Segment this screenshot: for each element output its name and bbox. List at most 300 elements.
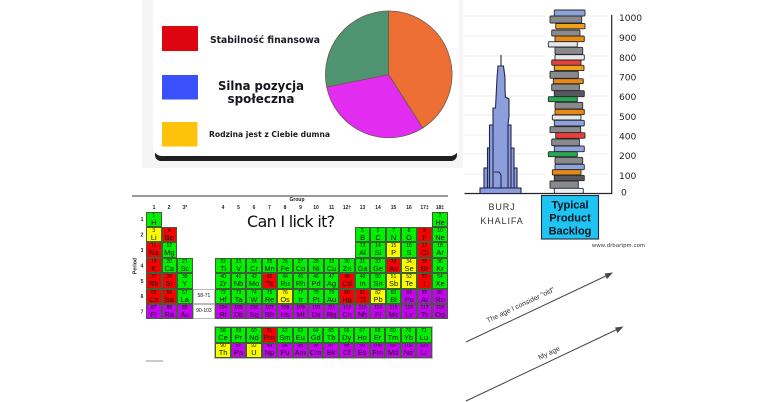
legend swatch: yellow: [162, 122, 198, 146]
periodic table: main grid: Fr: [150, 310, 157, 319]
arrow: the age I consider old: [466, 272, 613, 342]
periodic table: main grid: Be: [165, 233, 174, 242]
periodic table: lanthanides and actinides: Lr: [421, 348, 427, 357]
periodic table: main grid: 78: [313, 290, 319, 296]
periodic table: main grid: 10: [437, 228, 443, 234]
periodic table: lanthanides and actinides: Pu: [280, 348, 289, 357]
periodic table: main grid: 82: [375, 290, 381, 296]
periodic table: main grid: 2: [439, 213, 441, 219]
periodic table: lanthanides and actinides: Ce: [218, 333, 228, 342]
group numbers: [153, 205, 444, 211]
icon: burj khalifa tower: [480, 55, 521, 194]
periodic table: lanthanides and actinides: 95: [298, 343, 303, 349]
periodic table: main grid: 83: [391, 290, 396, 296]
periodic table: lanthanides and actinides: 70: [406, 328, 411, 334]
periodic table: main grid: 42: [251, 274, 257, 280]
periodic table: main grid: F: [422, 233, 427, 242]
periodic table: main grid: 32: [375, 259, 381, 265]
panel: burj khalifa vs product backlog chart: [464, 10, 645, 249]
periodic table: main grid: Pb: [374, 295, 383, 304]
arrow: my age: My age: [537, 346, 561, 362]
group numbers: 11: [329, 205, 334, 211]
periodic table: lanthanides and actinides: 66: [344, 328, 349, 334]
periodic table: lanthanides and actinides: Dy: [342, 333, 351, 342]
periodic table: main grid: Ba: [165, 295, 174, 304]
group numbers: 6: [253, 205, 256, 211]
periodic table: lanthanides and actinides: Pr: [235, 333, 242, 342]
periodic table: main grid: 58-71: [198, 293, 210, 299]
periodic table: lanthanides and actinides: 94: [282, 343, 288, 349]
periodic table: main grid: 6: [377, 228, 379, 234]
periodic table: main grid: P: [391, 248, 396, 257]
periodic table: lanthanides and actinides: 67: [359, 328, 365, 334]
period numbers: 5: [141, 279, 144, 285]
periodic table: main grid: 111: [328, 305, 335, 311]
periodic table: main grid: Zr: [220, 279, 227, 288]
periodic table: main grid: Ni: [313, 264, 320, 273]
periodic table: main grid: Te: [405, 279, 413, 288]
periodic table: main grid: 35: [422, 259, 427, 265]
group numbers: 14: [375, 205, 381, 211]
periodic table: main grid: Mt: [296, 310, 305, 319]
periodic table: main grid: 55: [151, 290, 157, 296]
periodic table: main grid: 4: [168, 228, 171, 234]
group numbers: 12†: [343, 205, 351, 211]
periodic table: main grid: 27: [298, 259, 303, 265]
periodic table: main grid: Ca: [165, 264, 174, 273]
periodic table: main grid: Br: [421, 264, 428, 273]
periodic table: main grid: Og: [435, 310, 445, 319]
periodic table: main grid: Ra: [165, 310, 174, 319]
periodic table: main grid: Co: [296, 264, 305, 273]
periodic table: main grid: 50: [375, 274, 381, 280]
period numbers: 4: [141, 264, 144, 270]
periodic table: main grid: Sg: [250, 310, 259, 319]
periodic table: main grid: 19: [151, 259, 157, 265]
periodic table: lanthanides and actinides: 90: [220, 343, 226, 349]
periodic table: main grid: Tl: [359, 295, 366, 304]
axis value labels: 800: [619, 53, 636, 64]
periodic table: main grid: 90-103: [196, 308, 212, 314]
periodic table: lanthanides and actinides: 69: [390, 328, 396, 334]
periodic table: lanthanides and actinides: Gd: [311, 333, 321, 342]
periodic table: lanthanides and actinides: 98: [344, 343, 349, 349]
label: burj khalifa: KHALIFA: [480, 216, 524, 226]
group numbers: 10: [313, 205, 319, 211]
legend label: silna pozycja społeczna: Silna pozycja: [218, 78, 304, 93]
label: burj khalifa: [480, 202, 524, 226]
periodic table: main grid: Xe: [436, 279, 445, 288]
periodic table: main grid: 104: [219, 305, 227, 311]
periodic table: lanthanides and actinides: 92: [251, 343, 257, 349]
periodic table: main grid: 28: [313, 259, 319, 265]
periodic table: lanthanides and actinides: 64: [313, 328, 319, 334]
pie chart: [325, 11, 452, 138]
periodic table: main grid: In: [359, 279, 366, 288]
periodic table: main grid: Ru: [280, 279, 290, 288]
periodic table: main grid: 115: [390, 305, 398, 311]
periodic table: main grid: Rf: [219, 310, 227, 319]
periodic table: main grid: 23: [236, 259, 241, 265]
periodic table: lanthanides and actinides: No: [404, 348, 413, 357]
periodic table: main grid: 117: [421, 305, 429, 311]
periodic table: main grid: Mg: [164, 248, 174, 257]
periodic table: lanthanides and actinides: Nd: [249, 333, 259, 342]
periodic table: main grid: Rn: [435, 295, 445, 304]
periodic table: main grid: 72: [220, 290, 226, 296]
group numbers: 7: [268, 205, 271, 211]
periodic table: lanthanides and actinides: 91: [236, 343, 241, 349]
periodic table: main grid: Cd: [342, 279, 352, 288]
periodic table: main grid: Cr: [250, 264, 258, 273]
periodic table: main grid: 31: [360, 259, 365, 265]
periodic table: main grid: Sb: [389, 279, 398, 288]
arrow: the age I consider old: The age I consider "old": [486, 286, 556, 325]
axis value labels: 900: [619, 33, 636, 44]
arrow: my age: [466, 326, 624, 401]
periodic table: main grid: Nb: [234, 279, 243, 288]
periodic table: main grid: 110: [312, 305, 320, 311]
legend label: silna pozycja społeczna: społeczna: [228, 91, 294, 106]
periodic table: main grid: 44: [282, 274, 288, 280]
periodic table title: Can I lick it?: [247, 212, 334, 231]
periodic table: main grid: Po: [405, 295, 414, 304]
period numbers: 2: [141, 232, 144, 238]
periodic table: main grid: Db: [234, 310, 243, 319]
label box: typical product backlog: Product: [549, 212, 591, 224]
periodic table: lanthanides and actinides: Lu: [420, 333, 428, 342]
periodic table: main grid: Mo: [249, 279, 259, 288]
periodic table: main grid: B: [360, 233, 365, 242]
periodic table: main grid: 87: [151, 305, 157, 311]
periodic table: main grid: 22: [220, 259, 226, 265]
white card: [153, 0, 459, 156]
periodic table: main grid: 52: [406, 274, 412, 280]
periodic table: main grid: 85: [422, 290, 427, 296]
periodic table: lanthanides and actinides: Es: [358, 348, 366, 357]
periodic table: lanthanides and actinides: Cf: [343, 348, 350, 357]
periodic table: main grid: 112: [343, 305, 351, 311]
periodic table: main grid: Rb: [149, 279, 158, 288]
periodic table: main grid: Ar: [436, 248, 444, 257]
periodic table: lanthanides and actinides: Sm: [279, 333, 290, 342]
periodic table: lanthanides and actinides: 96: [313, 343, 319, 349]
periodic table: lanthanides and actinides: 58: [220, 328, 226, 334]
periodic table: main grid: 24: [251, 259, 257, 265]
periodic table: main grid: K: [151, 264, 156, 273]
periodic table: main grid: As: [389, 264, 398, 273]
periodic table: main grid: 47: [329, 274, 334, 280]
periodic table: main grid: Ge: [373, 264, 383, 273]
periodic table: lanthanides and actinides: 99: [359, 343, 365, 349]
group numbers: 5: [237, 205, 240, 211]
periodic table: main grid: Bi: [390, 295, 397, 304]
axis value labels: 700: [619, 72, 636, 84]
periodic table: lanthanides and actinides: Tb: [327, 333, 336, 342]
periodic table: main grid: 11: [151, 243, 156, 249]
label box: typical product backlog: Backlog: [549, 226, 591, 238]
periodic table: main grid: Se: [405, 264, 414, 273]
period numbers: 3: [141, 248, 144, 254]
periodic table: main grid: 56: [166, 290, 172, 296]
periodic table: main grid: Hf: [219, 295, 227, 304]
periodic table: lanthanides and actinides: Pm: [264, 333, 275, 342]
periodic table: main grid: Ga: [358, 264, 367, 273]
periodic table: main grid: Tc: [266, 279, 273, 288]
periodic table: main grid: 18: [437, 243, 443, 249]
periodic table: main grid: 106: [250, 305, 258, 311]
label box: typical product backlog: [542, 196, 598, 239]
periodic table: main grid: Na: [149, 248, 158, 257]
periodic table: main grid: H: [151, 218, 156, 227]
periodic table: main grid: 13: [360, 243, 365, 249]
periodic table: main grid: 57: [182, 290, 188, 296]
periodic table: lanthanides and actinides: Md: [388, 348, 398, 357]
periodic table: main grid: Y: [182, 279, 187, 288]
periodic table: lanthanides and actinides: 68: [375, 328, 380, 334]
periodic table: main grid: Sc: [180, 264, 189, 273]
axis value labels: 500: [619, 112, 636, 123]
period numbers: 7: [141, 310, 144, 316]
periodic table: main grid: Kr: [436, 264, 444, 273]
periodic table: main grid: Ag: [327, 279, 336, 288]
group numbers: 15: [391, 205, 396, 211]
periodic table: lanthanides and actinides: Cm: [310, 348, 321, 357]
periodic table: main grid: Mc: [389, 310, 398, 319]
periodic table: main grid: 113: [359, 305, 367, 311]
periodic table: lanthanides and actinides: 63: [298, 328, 303, 334]
periodic table: lanthanides and actinides: 103: [420, 343, 428, 349]
periodic table: main grid: Rh: [296, 279, 305, 288]
periodic table: lanthanides and actinides: Bk: [327, 348, 336, 357]
period numbers: 1: [141, 217, 144, 223]
periodic table: main grid: Ir: [298, 295, 303, 304]
periodic table: lanthanides and actinides: U: [251, 348, 257, 357]
periodic table: main grid: Cu: [327, 264, 336, 273]
periodic table: main grid: Lv: [405, 310, 413, 319]
arrow chart: ages: [466, 272, 624, 401]
axis value labels: 600: [619, 92, 636, 103]
periodic table: lanthanides and actinides: 60: [251, 328, 257, 334]
periodic table: main grid: 15: [391, 243, 396, 249]
periodic table: lanthanides and actinides: Yb: [404, 333, 413, 342]
axis value labels: 1000: [619, 13, 642, 24]
periodic table: main grid: 41: [236, 274, 241, 280]
periodic table: main grid: 81: [360, 290, 365, 296]
periodic table: main grid: N: [391, 233, 396, 242]
periodic table: main grid: 20: [166, 259, 172, 265]
periodic table: main grid: 43: [267, 274, 272, 280]
periodic table: main grid: Ts: [421, 310, 428, 319]
periodic table: main grid: Cs: [149, 295, 158, 304]
periodic table: main grid: 75: [267, 290, 272, 296]
axis value labels: 400: [619, 132, 636, 142]
periodic table: main grid: Cl: [421, 248, 428, 257]
icon: stack of backlog books: [548, 10, 585, 193]
periodic table: lanthanides and actinides: 71: [421, 328, 427, 334]
periodic table: main grid: 80: [344, 290, 350, 296]
periodic table: main grid: 40: [220, 274, 226, 280]
periodic table: main grid: 76: [282, 290, 288, 296]
group numbers: 16: [406, 205, 412, 211]
periodic table: lanthanides and actinides: 100: [373, 343, 382, 349]
periodic table: main grid: 39: [182, 274, 188, 280]
periodic table: lanthanides and actinides: Pa: [234, 348, 243, 357]
legend label: rodzina jest z ciebie dumna: Rodzina jest z Ciebie dumna: [209, 130, 330, 139]
periodic table: main grid: Ti: [220, 264, 226, 273]
periodic table: lanthanides and actinides: 62: [282, 328, 288, 334]
periodic table: main grid: 37: [151, 274, 157, 280]
periodic table: main grid: Ac: [180, 310, 189, 319]
periodic table: main grid: 25: [267, 259, 272, 265]
periodic table: main grid: Rg: [327, 310, 336, 319]
periodic table: main grid: Nh: [358, 310, 367, 319]
chart axes: [464, 15, 612, 194]
axis value labels: [619, 13, 642, 198]
periodic table: main grid: 17: [422, 243, 427, 249]
periodic table: lanthanides and actinides: Fm: [372, 348, 383, 357]
periodic table: main grid: Pt: [313, 295, 320, 304]
periodic table: main grid: Au: [327, 295, 336, 304]
periodic table: main grid: 5: [361, 228, 364, 234]
periodic table: main grid: Re: [265, 295, 274, 304]
periodic table: main grid: 34: [406, 259, 412, 265]
periodic table: lanthanides and actinides: 101: [389, 343, 397, 349]
legend swatch: blue: [162, 75, 198, 100]
card bottom shadow: [155, 148, 457, 161]
periodic table: main grid: Zn: [343, 264, 351, 273]
periodic table: main grid: 109: [296, 305, 305, 311]
periodic table: main grid: 14: [375, 243, 381, 249]
periodic table: main grid: Fl: [375, 310, 381, 319]
periodic table: main grid: 54: [437, 274, 443, 280]
axis value labels: 100: [619, 171, 636, 182]
group numbers: 8: [284, 205, 287, 211]
periodic table: main grid: Sr: [166, 279, 173, 288]
axis value labels: 0: [621, 188, 627, 198]
periodic table: main grid: 21: [182, 259, 188, 265]
periodic table: lanthanides and actinides: Ho: [357, 333, 367, 342]
periodic table: lanthanides and actinides: Np: [265, 348, 274, 357]
periodic table: main grid: [146, 212, 448, 319]
axis value labels: 200: [619, 151, 636, 162]
periodic table: main grid: Li: [151, 233, 157, 242]
periodic table: main grid: 8: [408, 228, 410, 234]
legend label: silna pozycja społeczna: [218, 78, 304, 106]
periodic table: main grid: 12: [166, 243, 172, 249]
periodic table: main grid: V: [236, 264, 241, 273]
periodic table: main grid: S: [407, 248, 412, 257]
periodic table heading and axes: Group: [290, 197, 304, 203]
periodic table: main grid: 3: [152, 228, 155, 234]
periodic table: main grid: Sn: [374, 279, 383, 288]
periodic table: main grid: 79: [329, 290, 334, 296]
periodic table: lanthanides and actinides: [215, 327, 432, 358]
period numbers: [141, 217, 144, 316]
group numbers: 9: [299, 205, 302, 211]
period numbers: 6: [141, 294, 144, 300]
periodic table: main grid: Ta: [235, 295, 242, 304]
group numbers: 4: [222, 205, 225, 211]
periodic table heading and axes: [132, 196, 448, 361]
group numbers: 18‡: [436, 205, 444, 211]
periodic table: main grid: 53: [422, 274, 427, 280]
periodic table: lanthanides and actinides: 61: [267, 328, 272, 334]
periodic table: main grid: 74: [251, 290, 257, 296]
periodic table: main grid: 7: [392, 228, 395, 234]
periodic table: main grid: 48: [344, 274, 350, 280]
periodic table: main grid: 118: [436, 305, 444, 311]
periodic table: lanthanides and actinides: Th: [219, 348, 227, 357]
small mark: [146, 360, 163, 362]
periodic table: main grid: Ds: [312, 310, 321, 319]
periodic table heading and axes: Period: [132, 258, 138, 274]
periodic table: main grid: 89: [182, 305, 188, 311]
periodic table: main grid: 107: [265, 305, 274, 311]
periodic table: main grid: 16: [406, 243, 412, 249]
periodic table: main grid: 36: [437, 259, 443, 265]
periodic table: main grid: At: [421, 295, 428, 304]
periodic table: main grid: He: [435, 218, 445, 227]
periodic table: main grid: C: [375, 233, 381, 242]
periodic table: lanthanides and actinides: Am: [295, 348, 306, 357]
periodic table: main grid: La: [181, 295, 189, 304]
periodic table: lanthanides and actinides: 93: [267, 343, 272, 349]
periodic table: main grid: 26: [282, 259, 288, 265]
periodic table: main grid: 108: [281, 305, 289, 311]
periodic table: main grid: 33: [391, 259, 396, 265]
periodic table: main grid: I: [424, 279, 426, 288]
periodic table: main grid: 51: [391, 274, 396, 280]
periodic table: lanthanides and actinides: Eu: [296, 333, 305, 342]
periodic table: main grid: 73: [236, 290, 241, 296]
periodic table: main grid: 116: [405, 305, 413, 311]
periodic table: lanthanides and actinides: Tm: [388, 333, 398, 342]
label: burj khalifa: BURJ: [488, 202, 516, 212]
periodic table: main grid: Pd: [312, 279, 321, 288]
periodic table: main grid: 105: [234, 305, 243, 311]
periodic table: main grid: Bh: [265, 310, 274, 319]
periodic table: main grid: 86: [437, 290, 443, 296]
group numbers: 2: [168, 205, 171, 211]
periodic table: main grid: O: [406, 233, 412, 242]
periodic table: main grid: Fe: [281, 264, 289, 273]
periodic table: lanthanides and actinides: 65: [328, 328, 334, 334]
periodic table: main grid: Hg: [342, 295, 352, 304]
periodic table: lanthanides and actinides: 97: [328, 343, 334, 349]
periodic table: main grid: Os: [280, 295, 290, 304]
group numbers: 17‡: [420, 205, 429, 211]
periodic table: lanthanides and actinides: 102: [404, 343, 413, 349]
legend label: stabilność finansowa: Stabilność finansowa: [210, 34, 320, 46]
periodic table: main grid: 9: [423, 228, 426, 234]
periodic table: main grid: 29: [329, 259, 334, 265]
periodic table: main grid: 114: [374, 305, 382, 311]
periodic table: main grid: 88: [166, 305, 172, 311]
periodic table: main grid: 30: [344, 259, 350, 265]
periodic table: lanthanides and actinides: 59: [236, 328, 241, 334]
group numbers: 3*: [183, 205, 187, 211]
periodic table: main grid: 77: [298, 290, 303, 296]
periodic table: main grid: Hs: [281, 310, 290, 319]
source credit: www.drbartpm.com: [591, 243, 645, 249]
periodic table: main grid: 84: [406, 290, 412, 296]
periodic table: main grid: 49: [360, 274, 365, 280]
periodic table: main grid: Ne: [435, 233, 445, 242]
periodic table: main grid: Si: [375, 248, 381, 257]
periodic table: main grid: 38: [166, 274, 172, 280]
group numbers: 1: [153, 205, 156, 211]
